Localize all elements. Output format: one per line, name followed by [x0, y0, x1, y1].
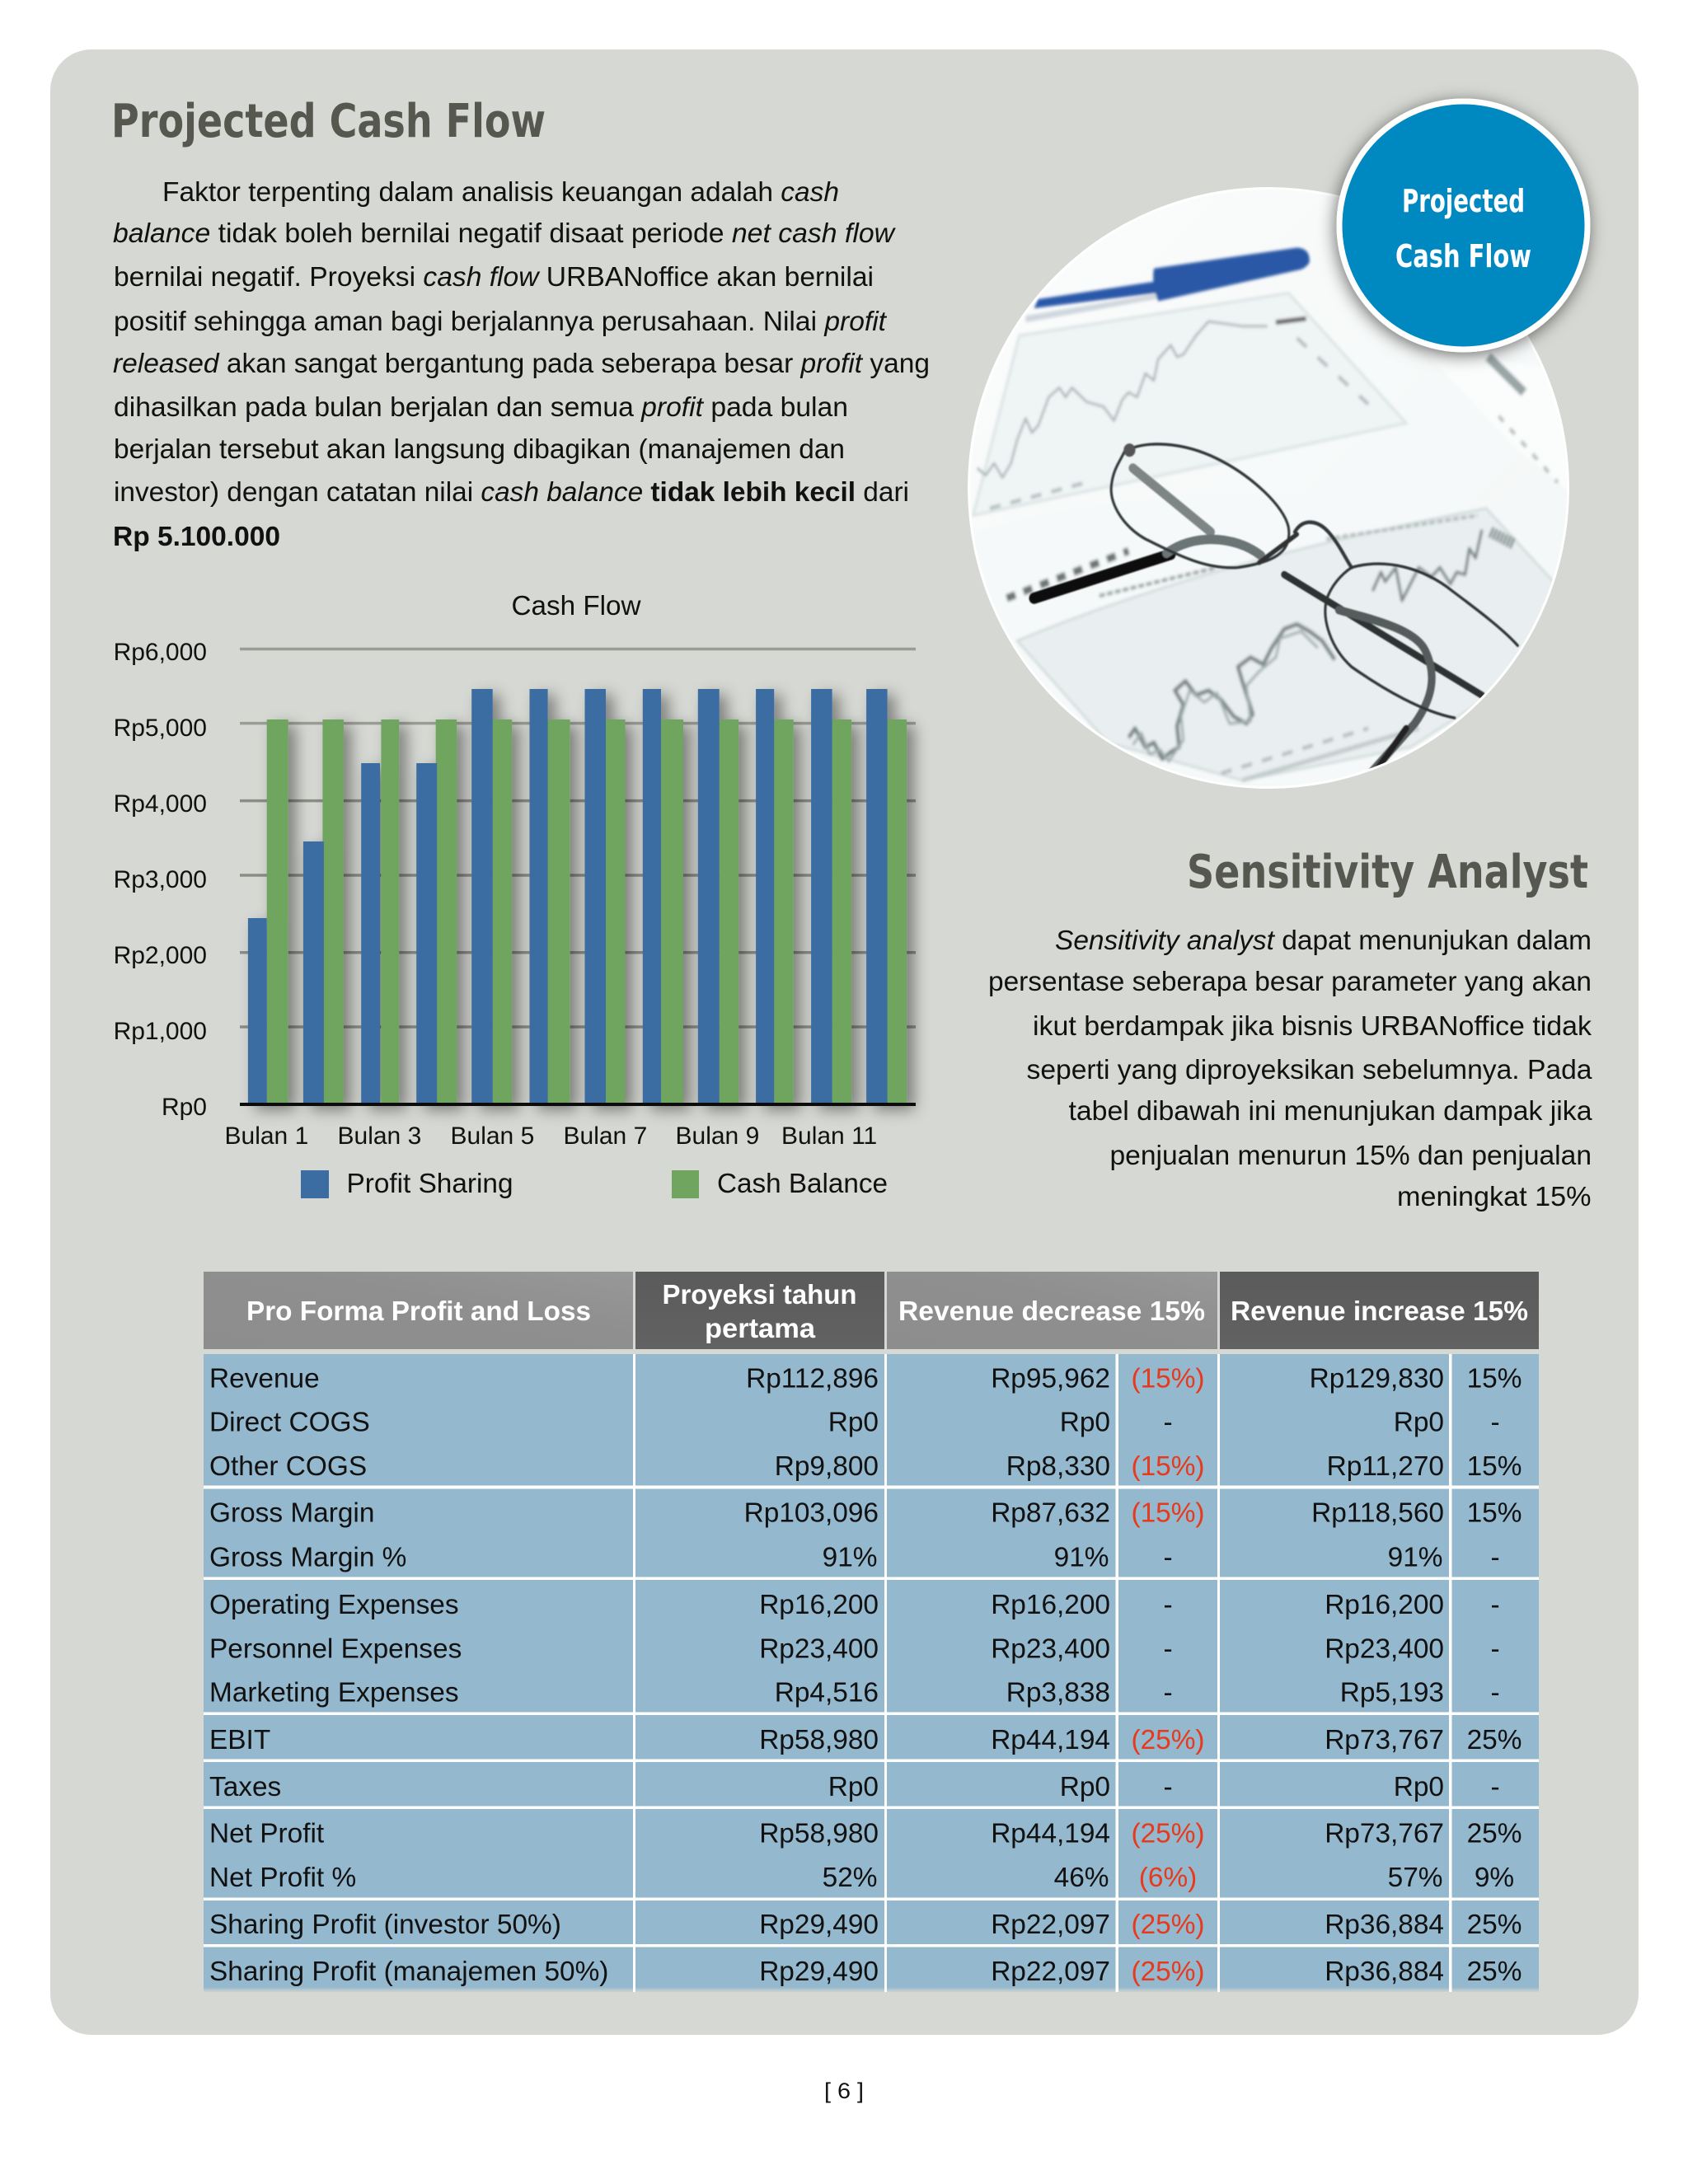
text block: cash flow paragraph: positif sehingga aman bagi berjalannya perusahaan. Nilai profit — [114, 307, 888, 337]
table: pro forma profit and loss sensitivity — [204, 1272, 1539, 1993]
bar chart: Cash Flow — [114, 591, 916, 1199]
row: Operating Expenses: Rp16,200 — [1325, 1590, 1444, 1620]
row: Gross Margin: Rp87,632 — [991, 1498, 1110, 1528]
row: Taxes: Rp0 — [1060, 1772, 1110, 1802]
row: Marketing Expenses: - — [1163, 1678, 1173, 1708]
row: Other COGS: Rp8,330 — [1006, 1451, 1110, 1482]
badge: Projected Cash Flow: Cash Flow — [1395, 238, 1531, 274]
row: Sharing Profit investor: Rp22,097 — [991, 1910, 1110, 1940]
row: Other COGS: (15%) — [1131, 1451, 1205, 1482]
row: Direct COGS: Rp0 — [1060, 1408, 1110, 1437]
row: Direct COGS: - — [1490, 1408, 1500, 1437]
row: Operating Expenses: - — [1490, 1590, 1500, 1620]
row: Net Profit percent: 52% — [823, 1863, 877, 1893]
row: Other COGS: Rp11,270 — [1327, 1451, 1444, 1482]
y axis labels: Rp1,000 — [114, 1018, 207, 1045]
text block: cash flow paragraph: Rp 5.100.000 — [113, 522, 280, 552]
table header row — [204, 1272, 1539, 1349]
x axis labels: Bulan 5 — [450, 1122, 534, 1150]
row: Gross Margin percent: - — [1163, 1543, 1173, 1572]
row: Gross Margin percent: 91% — [1054, 1543, 1109, 1572]
text block: cash flow paragraph: balance tidak boleh bernilai negatif disaat periode net cash flow — [113, 218, 896, 249]
text block: sensitivity paragraph — [988, 926, 1592, 1212]
row: Net Profit: Rp44,194 — [991, 1818, 1110, 1849]
row: EBIT: Rp73,767 — [1325, 1725, 1444, 1755]
text block: cash flow paragraph — [113, 177, 930, 552]
row: Net Profit percent: 57% — [1388, 1863, 1442, 1893]
x axis labels: Bulan 3 — [338, 1122, 421, 1150]
x axis labels: Bulan 11 — [781, 1122, 877, 1150]
photo: glasses and pen on financial charts — [964, 185, 1574, 794]
row: Revenue — [209, 1363, 1522, 1394]
row: EBIT: Rp58,980 — [759, 1725, 879, 1755]
row: Net Profit: 25% — [1467, 1818, 1522, 1849]
row: EBIT: (25%) — [1131, 1725, 1205, 1755]
row: Personnel Expenses: Rp23,400 — [991, 1633, 1110, 1665]
row: Direct COGS: Rp0 — [828, 1408, 879, 1437]
row: Sharing Profit manajemen: Rp36,884 — [1325, 1957, 1444, 1987]
row: Revenue: Rp129,830 — [1310, 1363, 1444, 1394]
row: Sharing Profit investor: Rp29,490 — [759, 1910, 879, 1940]
legend: Cash Balance — [717, 1169, 888, 1199]
row: Gross Margin percent: 91% — [1388, 1543, 1442, 1572]
row: Direct COGS — [209, 1408, 1500, 1437]
row: Net Profit percent: 46% — [1054, 1863, 1109, 1893]
row: Operating Expenses: Rp16,200 — [759, 1590, 879, 1620]
row: Sharing Profit investor: 25% — [1467, 1910, 1522, 1940]
row: Gross Margin: Gross Margin — [209, 1498, 374, 1528]
row: Direct COGS: - — [1163, 1408, 1173, 1437]
row: Revenue: Rp95,962 — [991, 1363, 1110, 1394]
x axis line — [240, 1103, 916, 1106]
row: Sharing Profit investor — [209, 1910, 1522, 1940]
text block: cash flow paragraph: Faktor terpenting dalam analisis keuangan adalah cash — [162, 177, 839, 208]
row: Marketing Expenses: Rp5,193 — [1340, 1678, 1444, 1708]
legend — [301, 1169, 888, 1199]
text block: cash flow paragraph: dihasilkan pada bulan berjalan dan semua profit pada bulan — [114, 392, 848, 423]
row: Taxes: Taxes — [209, 1772, 281, 1802]
row: Operating Expenses: Rp16,200 — [991, 1590, 1110, 1620]
row: Sharing Profit manajemen — [209, 1957, 1522, 1987]
text block: sensitivity paragraph: persentase seberapa besar parameter yang akan — [988, 967, 1592, 997]
row: Gross Margin percent — [209, 1543, 1500, 1572]
row: Other COGS — [209, 1451, 1522, 1482]
row: Net Profit percent: 9% — [1475, 1863, 1514, 1893]
text block: cash flow paragraph: released akan sangat bergantung pada seberapa besar profit yang — [113, 349, 930, 379]
row: Sharing Profit investor: Rp36,884 — [1325, 1910, 1444, 1940]
text block: sensitivity paragraph: meningkat 15% — [1397, 1182, 1591, 1212]
row: EBIT: EBIT — [209, 1725, 270, 1755]
badge: Projected Cash Flow — [1339, 101, 1587, 349]
row: Personnel Expenses: - — [1490, 1633, 1500, 1665]
row: Operating Expenses: - — [1163, 1590, 1173, 1620]
row: Marketing Expenses — [209, 1678, 1500, 1708]
row: Net Profit: (25%) — [1131, 1818, 1205, 1849]
grid lines — [240, 649, 916, 1027]
row: Sharing Profit investor: (25%) — [1131, 1910, 1205, 1940]
bars: cash balance and profit sharing — [248, 689, 907, 1104]
table header row: pertama — [705, 1314, 815, 1344]
row: Net Profit: Net Profit — [209, 1818, 325, 1849]
row: Revenue: Revenue — [209, 1363, 320, 1394]
x axis labels: Bulan 9 — [676, 1122, 759, 1150]
x axis labels: Bulan 7 — [564, 1122, 647, 1150]
table body background — [204, 1354, 1539, 1993]
table header row: Pro Forma Profit and Loss — [246, 1296, 591, 1327]
row: Operating Expenses — [209, 1590, 1500, 1620]
row: Gross Margin: Rp118,560 — [1311, 1498, 1444, 1528]
row: Net Profit: Rp58,980 — [759, 1818, 879, 1849]
row: Revenue: 15% — [1467, 1363, 1522, 1394]
y axis labels — [114, 639, 207, 1121]
chart title: Cash Flow — [511, 591, 641, 621]
row: Marketing Expenses: Rp3,838 — [1006, 1678, 1110, 1708]
legend: Profit Sharing — [346, 1169, 513, 1199]
heading: Sensitivity Analyst: Sensitivity Analyst — [1187, 846, 1588, 899]
row: Direct COGS: Direct COGS — [209, 1408, 370, 1437]
text block: sensitivity paragraph: penjualan menurun 15% dan penjualan — [1109, 1141, 1592, 1171]
row: Other COGS: Other COGS — [209, 1451, 367, 1482]
row: Personnel Expenses: - — [1163, 1633, 1173, 1665]
row: Sharing Profit manajemen: 25% — [1467, 1957, 1522, 1987]
row: Taxes: - — [1163, 1772, 1173, 1802]
row: Gross Margin percent: Gross Margin % — [209, 1543, 406, 1572]
row: Marketing Expenses: Rp4,516 — [775, 1678, 879, 1708]
row: Sharing Profit investor: Sharing Profit (investor 50%) — [209, 1910, 561, 1940]
table header row: Proyeksi tahun — [663, 1280, 857, 1310]
row: Revenue: Rp112,896 — [746, 1363, 879, 1394]
row: Gross Margin: 15% — [1467, 1498, 1522, 1528]
y axis labels: Rp0 — [162, 1094, 207, 1121]
row: Other COGS: 15% — [1467, 1451, 1522, 1482]
row: Marketing Expenses: Marketing Expenses — [209, 1678, 459, 1708]
text block: sensitivity paragraph: ikut berdampak jika bisnis URBANoffice tidak — [1033, 1011, 1592, 1042]
table header row: Revenue decrease 15% — [898, 1296, 1205, 1327]
text block: sensitivity paragraph: seperti yang diproyeksikan sebelumnya. Pada — [1027, 1055, 1592, 1085]
row: Personnel Expenses: Rp23,400 — [759, 1633, 879, 1665]
row: Net Profit percent — [209, 1863, 1514, 1893]
title: Projected Cash Flow: Projected Cash Flow — [111, 95, 546, 148]
row: Sharing Profit manajemen: Rp22,097 — [991, 1957, 1110, 1987]
row: Sharing Profit manajemen: (25%) — [1131, 1957, 1205, 1987]
row: Taxes: Rp0 — [1394, 1772, 1444, 1802]
row: Operating Expenses: Operating Expenses — [209, 1590, 459, 1620]
y axis labels: Rp6,000 — [114, 639, 207, 666]
row: Revenue: (15%) — [1131, 1363, 1205, 1394]
table header row: Revenue increase 15% — [1231, 1296, 1528, 1327]
row: Marketing Expenses: - — [1490, 1678, 1500, 1708]
badge: Projected Cash Flow: Projected — [1402, 183, 1525, 219]
row: Personnel Expenses: Personnel Expenses — [209, 1633, 462, 1665]
text block: sensitivity paragraph: Sensitivity analyst dapat menunjukan dalam — [1055, 926, 1592, 956]
row: Taxes: - — [1490, 1772, 1500, 1802]
row: EBIT: 25% — [1467, 1725, 1522, 1755]
row: Gross Margin: (15%) — [1131, 1498, 1205, 1528]
row: Sharing Profit manajemen: Sharing Profit (manajemen 50%) — [209, 1957, 608, 1987]
row: Direct COGS: Rp0 — [1394, 1408, 1444, 1437]
y axis labels: Rp5,000 — [114, 715, 207, 742]
text block: cash flow paragraph: berjalan tersebut akan langsung dibagikan (manajemen dan — [114, 434, 845, 465]
row: Gross Margin: Rp103,096 — [744, 1498, 879, 1528]
x axis labels — [224, 1122, 877, 1150]
row: Gross Margin percent: 91% — [823, 1543, 877, 1572]
row: Net Profit percent: Net Profit % — [209, 1863, 356, 1893]
row: Other COGS: Rp9,800 — [775, 1451, 879, 1482]
row: Taxes: Rp0 — [828, 1772, 879, 1802]
row: Net Profit — [209, 1818, 1522, 1849]
row: EBIT: Rp44,194 — [991, 1725, 1110, 1755]
row: Gross Margin — [209, 1498, 1522, 1528]
row: Taxes — [209, 1772, 1500, 1802]
text block: sensitivity paragraph: tabel dibawah ini menunjukan dampak jika — [1068, 1096, 1592, 1127]
row: Gross Margin percent: - — [1490, 1543, 1500, 1572]
row: Net Profit: Rp73,767 — [1325, 1818, 1444, 1849]
row: EBIT — [209, 1725, 1522, 1755]
y axis labels: Rp2,000 — [114, 942, 207, 969]
y axis labels: Rp4,000 — [114, 790, 207, 818]
page number: [ 6 ] — [824, 2079, 864, 2103]
row: Sharing Profit manajemen: Rp29,490 — [759, 1957, 879, 1987]
text block: cash flow paragraph: investor) dengan catatan nilai cash balance tidak lebih kecil dari — [114, 477, 909, 508]
text block: cash flow paragraph: bernilai negatif. Proyeksi cash flow URBANoffice akan bernilai — [114, 262, 874, 293]
row: Net Profit percent: (6%) — [1139, 1863, 1197, 1893]
row: Personnel Expenses — [209, 1633, 1500, 1665]
y axis labels: Rp3,000 — [114, 866, 207, 893]
x axis labels: Bulan 1 — [224, 1122, 308, 1150]
row: Personnel Expenses: Rp23,400 — [1325, 1633, 1444, 1665]
